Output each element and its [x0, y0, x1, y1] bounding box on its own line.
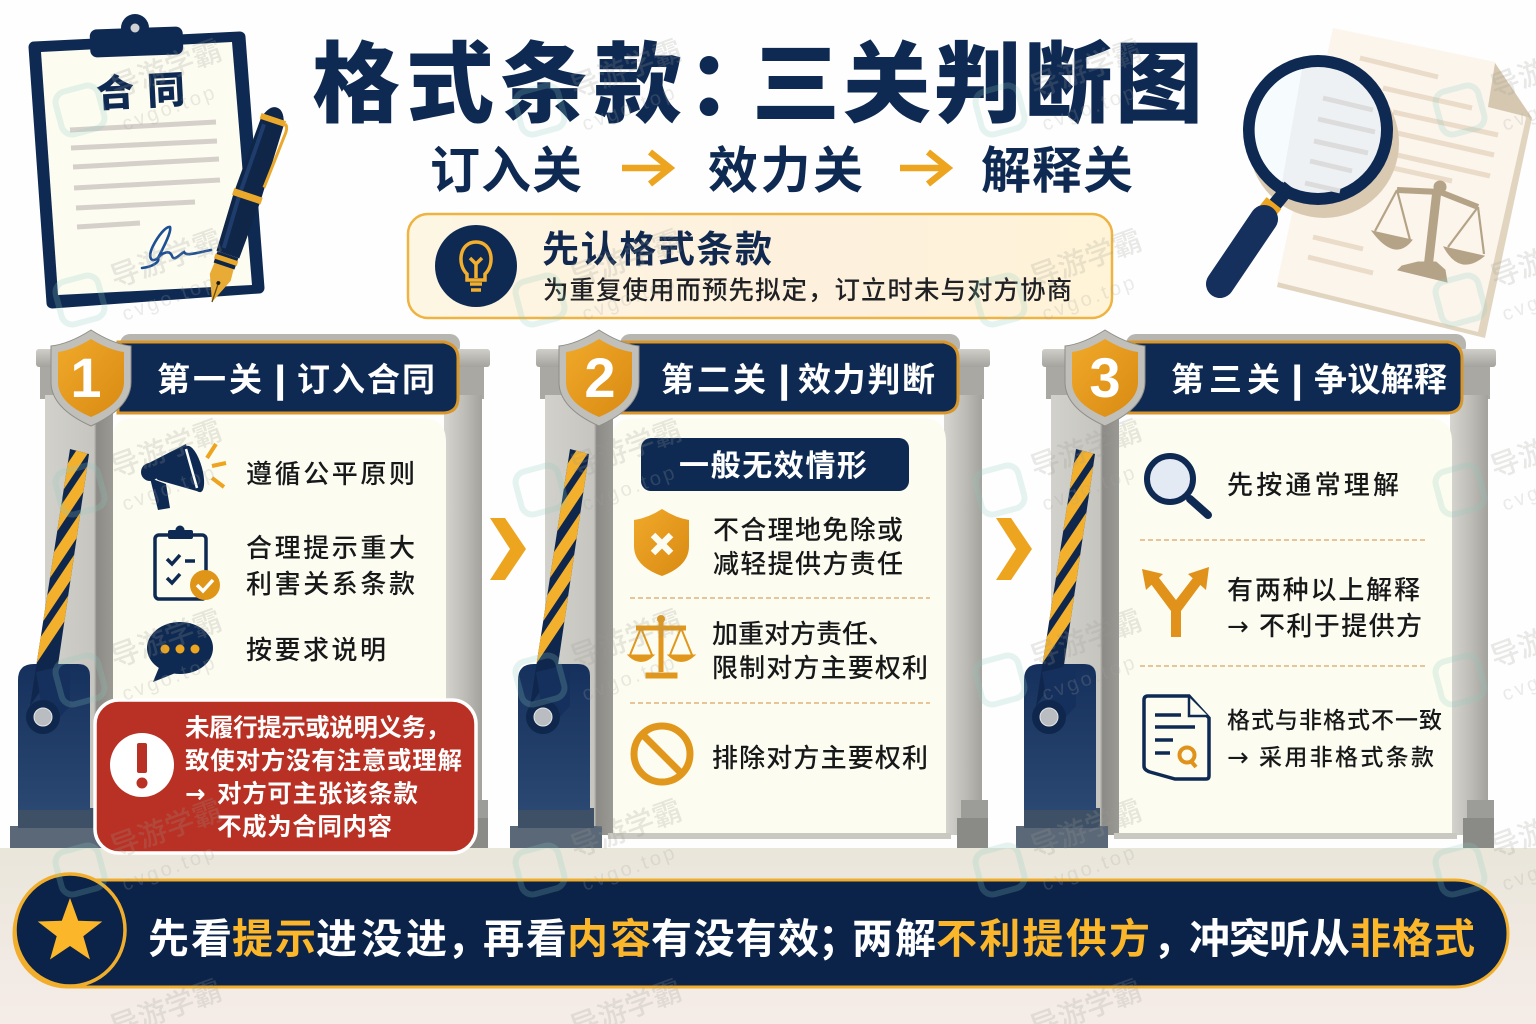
watermarks: 导游学霸 — [106, 604, 226, 675]
panel: gate 1 contents: 合理提示重大 — [246, 533, 415, 563]
watermarks: cvgo.top — [579, 461, 680, 516]
gate 1 header — [51, 330, 458, 426]
watermarks: 导游学霸 — [1026, 224, 1146, 295]
watermarks: cvgo.top — [119, 461, 220, 516]
watermarks: 导游学霸 — [566, 794, 686, 865]
magnifier — [1220, 55, 1399, 284]
panel: gate 1 contents: 按要求说明 — [246, 635, 386, 665]
summary sentence: ， — [447, 916, 488, 962]
watermarks: 导游学霸 — [566, 34, 686, 105]
summary sentence: 冲突听从 — [1189, 916, 1350, 962]
watermarks: 导游学霸 — [566, 414, 686, 485]
subtitle: three gates flow: 订入关 — [430, 143, 582, 199]
panel: gate 2 contents: 不合理地免除或 — [713, 515, 903, 545]
watermarks: 导游学霸 — [106, 414, 226, 485]
icon: document search — [1144, 696, 1209, 779]
gate 2 structure — [510, 334, 990, 848]
panel: gate 3 contents: 格式与非格式不一致 — [1227, 707, 1442, 733]
arrow: gate 1 to gate 2 — [490, 518, 526, 580]
icon: light bulb — [435, 225, 517, 307]
icon: prohibited — [634, 726, 690, 782]
callout: identify standard terms — [408, 214, 1112, 318]
summary sentence — [148, 916, 1475, 962]
title: 三关判断图 — [752, 35, 1203, 134]
summary sentence: 有没有效 — [651, 916, 819, 962]
gate 2 header: 第二关 — [661, 361, 766, 398]
panel: gate 3 contents: 采用非格式条款 — [1259, 744, 1434, 770]
panel: gate 2 contents — [628, 438, 930, 782]
subtitle: three gates flow — [430, 143, 1133, 199]
gate 1 header: 订入合同 — [297, 361, 435, 398]
icon: shield with cross — [634, 509, 689, 576]
watermarks: cvgo.top — [579, 271, 680, 326]
panel: gate 2 contents: 排除对方主要权利 — [712, 743, 928, 773]
gate 3 header — [1065, 330, 1462, 426]
summary sentence: 再看 — [483, 916, 567, 962]
summary sentence: 不利提供方 — [936, 916, 1150, 962]
watermarks: 导游学霸 — [1026, 414, 1146, 485]
title: 格式条款 — [312, 35, 682, 134]
arrow: gate 2 to gate 3 — [996, 518, 1032, 580]
summary banner — [14, 874, 1508, 987]
general invalid heading: 一般无效情形 — [679, 450, 867, 483]
icon: megaphone — [141, 444, 226, 510]
summary sentence: 两解 — [852, 916, 936, 962]
gate 2 header: | — [779, 359, 789, 401]
gate 2 header: 效力判断 — [798, 361, 935, 398]
callout: failure to notify: 不成为合同内容 — [217, 813, 392, 841]
callout: failure to notify — [95, 700, 476, 853]
gate 3 structure — [1016, 334, 1496, 848]
watermarks: cvgo.top — [579, 651, 680, 706]
summary sentence: 内容 — [567, 916, 651, 962]
icon: forking arrows — [1142, 567, 1209, 637]
icon: magnifying glass — [1147, 456, 1208, 515]
watermarks: cvgo.top — [579, 81, 680, 136]
callout: failure to notify: → — [185, 779, 206, 808]
watermarks: 导游学霸 — [106, 34, 226, 105]
watermarks: 导游学霸 — [1026, 34, 1146, 105]
icon: speech bubble — [147, 622, 213, 682]
title — [312, 35, 1203, 134]
panel: gate 3 contents: 先按通常理解 — [1227, 470, 1399, 500]
gate 3 header: | — [1292, 359, 1302, 401]
arrow — [900, 152, 948, 184]
watermarks: cvgo.top — [119, 81, 220, 136]
watermarks: cvgo.top — [579, 841, 680, 896]
panel: gate 2 contents: 减轻提供方责任 — [713, 549, 903, 579]
panel: gate 1 contents: 利害关系条款 — [246, 569, 415, 599]
watermarks: 导游学霸 — [106, 224, 226, 295]
summary sentence: 进没进 — [316, 916, 447, 962]
watermarks: 导游学霸 — [106, 794, 226, 865]
summary sentence: 先看 — [148, 916, 232, 962]
title: ： — [687, 35, 775, 134]
panel: gate 3 contents: 有两种以上解释 — [1227, 575, 1420, 605]
subtitle: three gates flow: 效力关 — [708, 143, 863, 199]
watermarks: cvgo.top — [119, 651, 220, 706]
illustration: magnifier over document with scales — [1220, 28, 1532, 338]
document scales — [1372, 181, 1484, 282]
icon: star badge — [15, 874, 125, 986]
icon: exclamation — [110, 733, 174, 797]
gate 1 header: 1 — [70, 346, 102, 409]
callout: failure to notify: 致使对方没有注意或理解 — [185, 746, 462, 775]
watermarks: cvgo.top — [1039, 651, 1140, 706]
panel: gate 3 contents: → — [1227, 612, 1249, 642]
gate 1 header: | — [275, 359, 285, 401]
watermarks: cvgo.top — [119, 841, 220, 896]
gate 3 header: 争议解释 — [1314, 361, 1447, 398]
icon: checklist — [155, 526, 220, 600]
watermarks: cvgo.top — [1039, 81, 1140, 136]
gate 2 header: 2 — [584, 346, 616, 409]
gate 1 structure — [10, 334, 490, 848]
watermarks: 导游学霸 — [566, 604, 686, 675]
gate 1 header: 第一关 — [157, 361, 262, 398]
icon: scales — [628, 616, 695, 678]
illustration: contract clipboard with pen: 合同 — [95, 70, 186, 116]
panel: gate 2 contents: 限制对方主要权利 — [712, 653, 928, 683]
panel: gate 1 contents — [141, 444, 415, 682]
watermarks: cvgo.top — [1039, 461, 1140, 516]
watermarks: cvgo.top — [1039, 271, 1140, 326]
panel: gate 1 contents: 遵循公平原则 — [246, 459, 415, 489]
watermarks: 导游学霸 — [1026, 794, 1146, 865]
watermarks: cvgo.top — [119, 271, 220, 326]
callout: failure to notify: 未履行提示或说明义务， — [185, 714, 450, 742]
general invalid heading — [641, 438, 909, 491]
panel: gate 2 contents: 加重对方责任、 — [712, 619, 894, 649]
watermarks: 导游学霸 — [1026, 604, 1146, 675]
callout: failure to notify: 对方可主张该条款 — [217, 779, 418, 808]
summary sentence: 提示 — [232, 916, 316, 962]
summary sentence: ， — [1153, 916, 1194, 962]
panel: gate 3 contents — [1140, 456, 1442, 779]
subtitle: three gates flow: 解释关 — [981, 143, 1133, 199]
callout: identify standard terms: 先认格式条款 — [542, 229, 772, 270]
summary sentence: ； — [818, 916, 859, 962]
gate 3 header: 第三关 — [1171, 361, 1280, 398]
panel: gate 3 contents: 不利于提供方 — [1259, 611, 1422, 641]
watermarks: cvgo.top — [1039, 841, 1140, 896]
summary sentence: 非格式 — [1350, 916, 1475, 962]
arrow — [622, 152, 670, 184]
watermarks: 导游学霸 — [566, 224, 686, 295]
illustration: contract clipboard with pen — [34, 14, 292, 307]
gate 2 header — [559, 330, 958, 426]
panel: gate 3 contents: → — [1227, 743, 1249, 773]
gate 3 header: 3 — [1089, 346, 1121, 409]
callout: identify standard terms: 为重复使用而预先拟定，订立时未与对方协商 — [543, 277, 1072, 305]
